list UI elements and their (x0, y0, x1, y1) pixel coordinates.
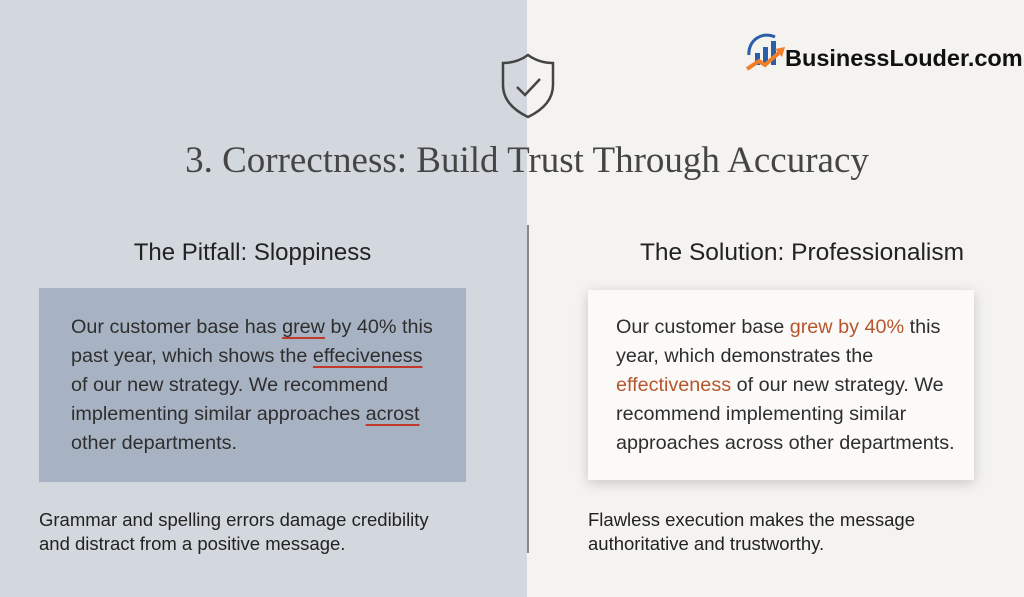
caption: solution (588, 509, 915, 554)
caption: pitfall (39, 509, 429, 554)
correct text box: recommend implementing similar (616, 403, 906, 425)
sloppy text box: implementing similar approaches acrost (71, 403, 420, 425)
correct text box: effectiveness of our new strategy. We (616, 374, 944, 396)
heading: solution: The Solution: Professionalism (640, 239, 964, 266)
sloppy text box: other departments. (71, 432, 237, 454)
caption: solution: authoritative and trustworthy. (588, 533, 824, 554)
sloppy text box: past year, which shows the effeciveness (71, 345, 423, 367)
caption: solution: Flawless execution makes the message (588, 509, 915, 530)
sloppy text box (39, 288, 466, 482)
sloppy text box: Our customer base has grew by 40% this (71, 316, 433, 338)
heading: pitfall: The Pitfall: Sloppiness (134, 239, 371, 266)
correct text box (588, 290, 974, 480)
panel: solution (582, 239, 980, 554)
correct text box: approaches across other departments. (616, 432, 955, 454)
panel: pitfall (39, 239, 466, 554)
sloppy text box: of our new strategy. We recommend (71, 374, 388, 396)
logo: BusinessLouder.com (785, 45, 1023, 71)
correct text box: Our customer base grew by 40% this (616, 316, 940, 338)
logo (746, 34, 1023, 71)
title: 3. Correctness: Build Trust Through Accuracy (185, 140, 869, 181)
caption: pitfall: and distract from a positive message. (39, 533, 345, 554)
icon: shield (502, 54, 554, 118)
correct text box: year, which demonstrates the (616, 345, 873, 367)
caption: pitfall: Grammar and spelling errors damage credibility (39, 509, 429, 530)
